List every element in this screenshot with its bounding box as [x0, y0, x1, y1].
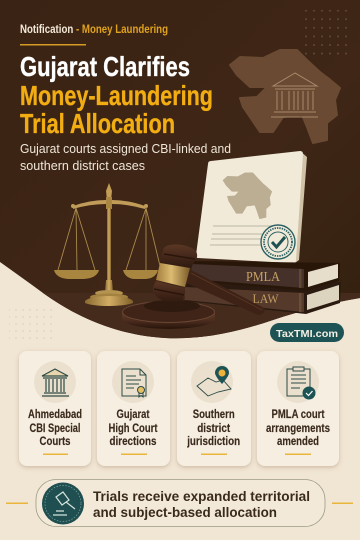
card: PMLA court arrangements amended — [257, 351, 339, 466]
gavel — [153, 244, 264, 315]
gavel head top — [160, 244, 197, 268]
law books — [185, 261, 341, 314]
card: Gujarat High Court directions: directions — [110, 436, 156, 448]
title: Gujarat Clarifies — [20, 51, 190, 82]
subtitle: Gujarat courts assigned CBI-linked and — [20, 141, 231, 156]
subtitle — [20, 141, 231, 173]
card: PMLA court arrangements amended: arrangements — [266, 423, 330, 435]
eyebrow rule — [20, 44, 86, 46]
title: Money-Laundering — [20, 80, 213, 111]
upper book — [190, 261, 340, 291]
card: Southern district jurisdiction: jurisdiction — [186, 436, 240, 448]
website badge: TaxTMI.com — [276, 328, 338, 340]
card: Gujarat High Court directions — [97, 351, 170, 466]
card: Southern district jurisdiction — [177, 351, 251, 466]
title: Trial Allocation — [20, 108, 175, 139]
card: Southern district jurisdiction: Southern — [193, 409, 235, 421]
card: PMLA court arrangements amended: amended — [277, 436, 319, 448]
gavel head bottom — [153, 281, 185, 303]
icon: gavel badge — [42, 482, 84, 524]
scales of justice — [54, 183, 161, 306]
card: Ahmedabad CBI Special Courts — [19, 351, 91, 466]
background map with temple — [230, 50, 340, 143]
gold band — [156, 263, 190, 287]
card: Ahmedabad CBI Special Courts: CBI Special — [30, 423, 80, 435]
icon: map pin — [197, 366, 231, 396]
lower book — [185, 282, 341, 314]
conclusion banner: Trials receive expanded territorial — [93, 489, 310, 504]
website badge — [270, 323, 344, 342]
card: PMLA court arrangements amended: PMLA court — [272, 409, 325, 421]
icon: document with seal — [122, 369, 146, 397]
card: Ahmedabad CBI Special Courts: Courts — [40, 436, 70, 448]
verified stamp — [261, 225, 295, 259]
icon: courthouse — [42, 369, 69, 396]
dark hero panel — [0, 0, 360, 343]
upper book: PMLA — [246, 270, 281, 285]
eyebrow: Notification - Money Laundering — [20, 22, 168, 36]
certificate document — [196, 151, 307, 263]
document map — [223, 173, 272, 219]
subtitle: southern district cases — [20, 158, 145, 173]
card: Gujarat High Court directions: Gujarat — [116, 409, 150, 421]
conclusion banner: and subject-based allocation — [93, 505, 277, 520]
title — [20, 51, 213, 139]
dot pattern: lower left — [9, 306, 53, 342]
sound block — [122, 300, 215, 329]
card: Ahmedabad CBI Special Courts: Ahmedabad — [28, 409, 82, 421]
lower book: LAW — [252, 291, 279, 306]
card: Gujarat High Court directions: High Court — [108, 423, 158, 435]
icon: clipboard with check — [287, 367, 316, 400]
conclusion banner — [6, 480, 353, 526]
dot pattern: top right — [302, 10, 352, 56]
card: Southern district jurisdiction: district — [197, 423, 230, 435]
